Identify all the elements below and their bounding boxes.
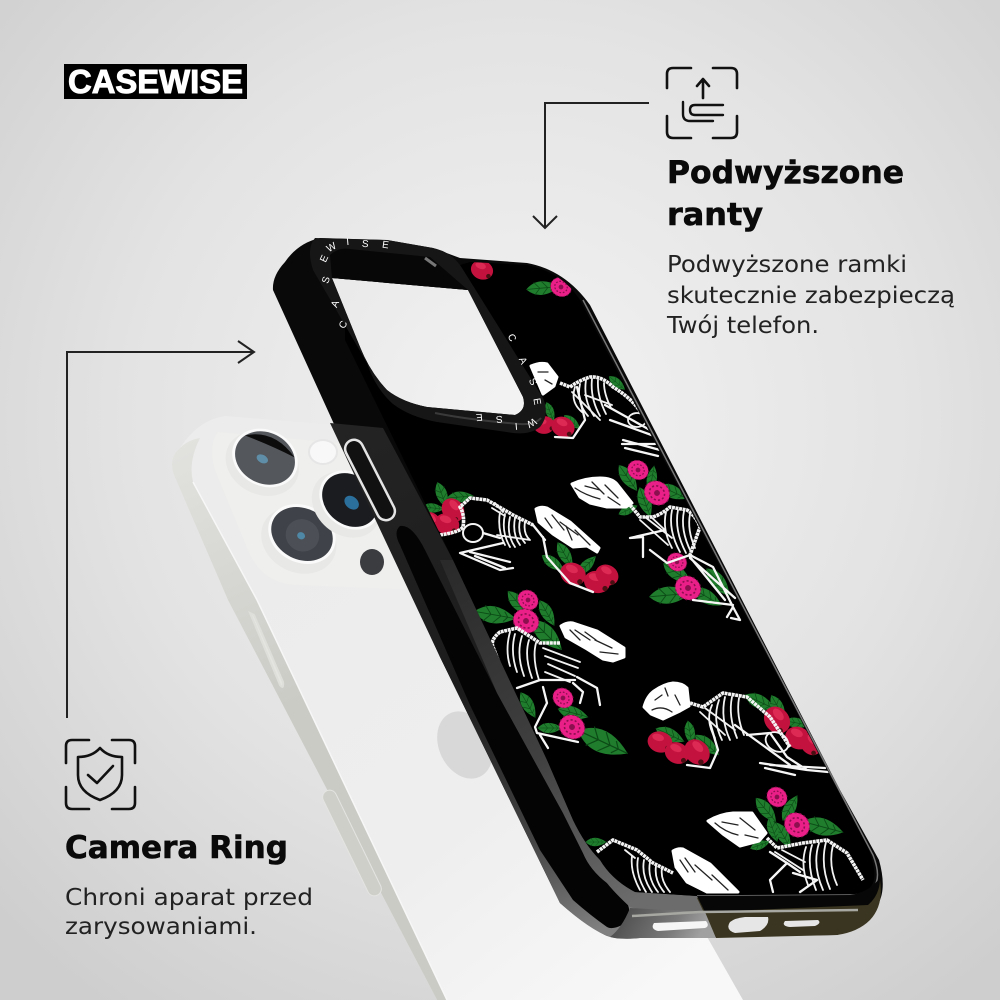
ring lower lip bbox=[435, 413, 541, 424]
skeleton E bbox=[644, 683, 828, 775]
ring lettering: S bbox=[361, 239, 369, 250]
ring lettering: S bbox=[526, 377, 539, 388]
text: camera ring: Chroni aparat przed bbox=[65, 885, 313, 911]
text: raised edges: Twój telefon. bbox=[666, 313, 819, 339]
button cutout bbox=[342, 437, 398, 523]
case inner band bbox=[440, 560, 705, 912]
icon: raised edges bbox=[667, 68, 737, 138]
camera plateau bbox=[212, 432, 420, 590]
text: raised edges: skutecznie zabezpieczą bbox=[667, 283, 955, 309]
speaker slot right bbox=[784, 920, 819, 927]
skeleton A bbox=[531, 363, 660, 456]
lens 3 bbox=[299, 456, 396, 551]
camera ring inner wall bbox=[330, 249, 468, 290]
text: camera ring bbox=[65, 885, 313, 940]
white phone bbox=[172, 416, 743, 1000]
skeleton G bbox=[586, 838, 738, 892]
skeleton B bbox=[572, 457, 740, 620]
ring lettering: C bbox=[505, 332, 518, 344]
arrow to camera ring bbox=[67, 341, 254, 718]
case body bbox=[273, 238, 883, 939]
charging port bbox=[728, 917, 768, 933]
ring lettering: S bbox=[495, 413, 503, 424]
skeleton C bbox=[417, 480, 622, 596]
phone side edge bbox=[172, 438, 447, 1000]
top berry and raspberry bbox=[470, 262, 572, 297]
icon: shield bbox=[66, 740, 135, 809]
ring lettering: E bbox=[530, 397, 543, 406]
ring lettering: C bbox=[337, 319, 350, 331]
microphone slot left bbox=[653, 921, 708, 931]
pattern artwork bbox=[340, 255, 885, 900]
logo bbox=[64, 63, 247, 100]
heading: raised edges: ranty bbox=[667, 197, 763, 233]
side button 2 bbox=[320, 788, 384, 898]
logo text: CASEWISE bbox=[68, 63, 243, 100]
text: camera ring: zarysowaniami. bbox=[65, 914, 257, 940]
logo box bbox=[64, 64, 247, 99]
lidar sensor bbox=[360, 549, 384, 575]
heading: raised edges bbox=[667, 155, 904, 233]
camera opening bbox=[332, 278, 524, 415]
phone side highlight bbox=[193, 482, 447, 1000]
case black slot bbox=[396, 526, 629, 928]
ring lettering bbox=[318, 237, 543, 431]
flash bbox=[309, 440, 337, 464]
skeleton D bbox=[476, 590, 628, 755]
ring lettering: A bbox=[516, 356, 529, 367]
lens 1 bbox=[214, 416, 312, 508]
bottom wall dark part bbox=[697, 880, 881, 938]
ring lettering: E bbox=[475, 411, 483, 422]
lens 2 bbox=[250, 491, 350, 586]
phone case bbox=[273, 237, 885, 939]
text: raised edges bbox=[666, 252, 955, 339]
ring lettering: A bbox=[329, 299, 342, 309]
ring lettering: W bbox=[524, 415, 538, 430]
heading: raised edges: Podwyższone bbox=[667, 155, 904, 191]
case wall over phone bbox=[330, 423, 640, 937]
skeleton F bbox=[708, 783, 863, 892]
bottom wall translucent part bbox=[610, 908, 716, 939]
ring inner highlight bbox=[425, 258, 436, 266]
case right bezel line bbox=[583, 300, 878, 896]
ring lettering: S bbox=[320, 275, 333, 285]
ring lettering: I bbox=[346, 237, 350, 248]
ring lettering: I bbox=[514, 420, 518, 431]
arrow to raised edges bbox=[533, 103, 649, 228]
bottom highlight bbox=[632, 910, 858, 916]
phone body bbox=[172, 416, 743, 1000]
ring lettering: E bbox=[381, 240, 390, 251]
art background bbox=[340, 255, 885, 900]
volume button 1 bbox=[250, 613, 283, 687]
bottom wall bbox=[610, 878, 881, 939]
logo shadow bbox=[427, 702, 503, 788]
ring lettering: W bbox=[325, 240, 339, 255]
heading: camera ring: Camera Ring bbox=[65, 830, 288, 866]
camera ring bbox=[310, 238, 546, 433]
ring lettering: E bbox=[318, 253, 331, 264]
bottom black lip bbox=[697, 878, 880, 912]
text: raised edges: Podwyższone ramki bbox=[667, 252, 907, 278]
